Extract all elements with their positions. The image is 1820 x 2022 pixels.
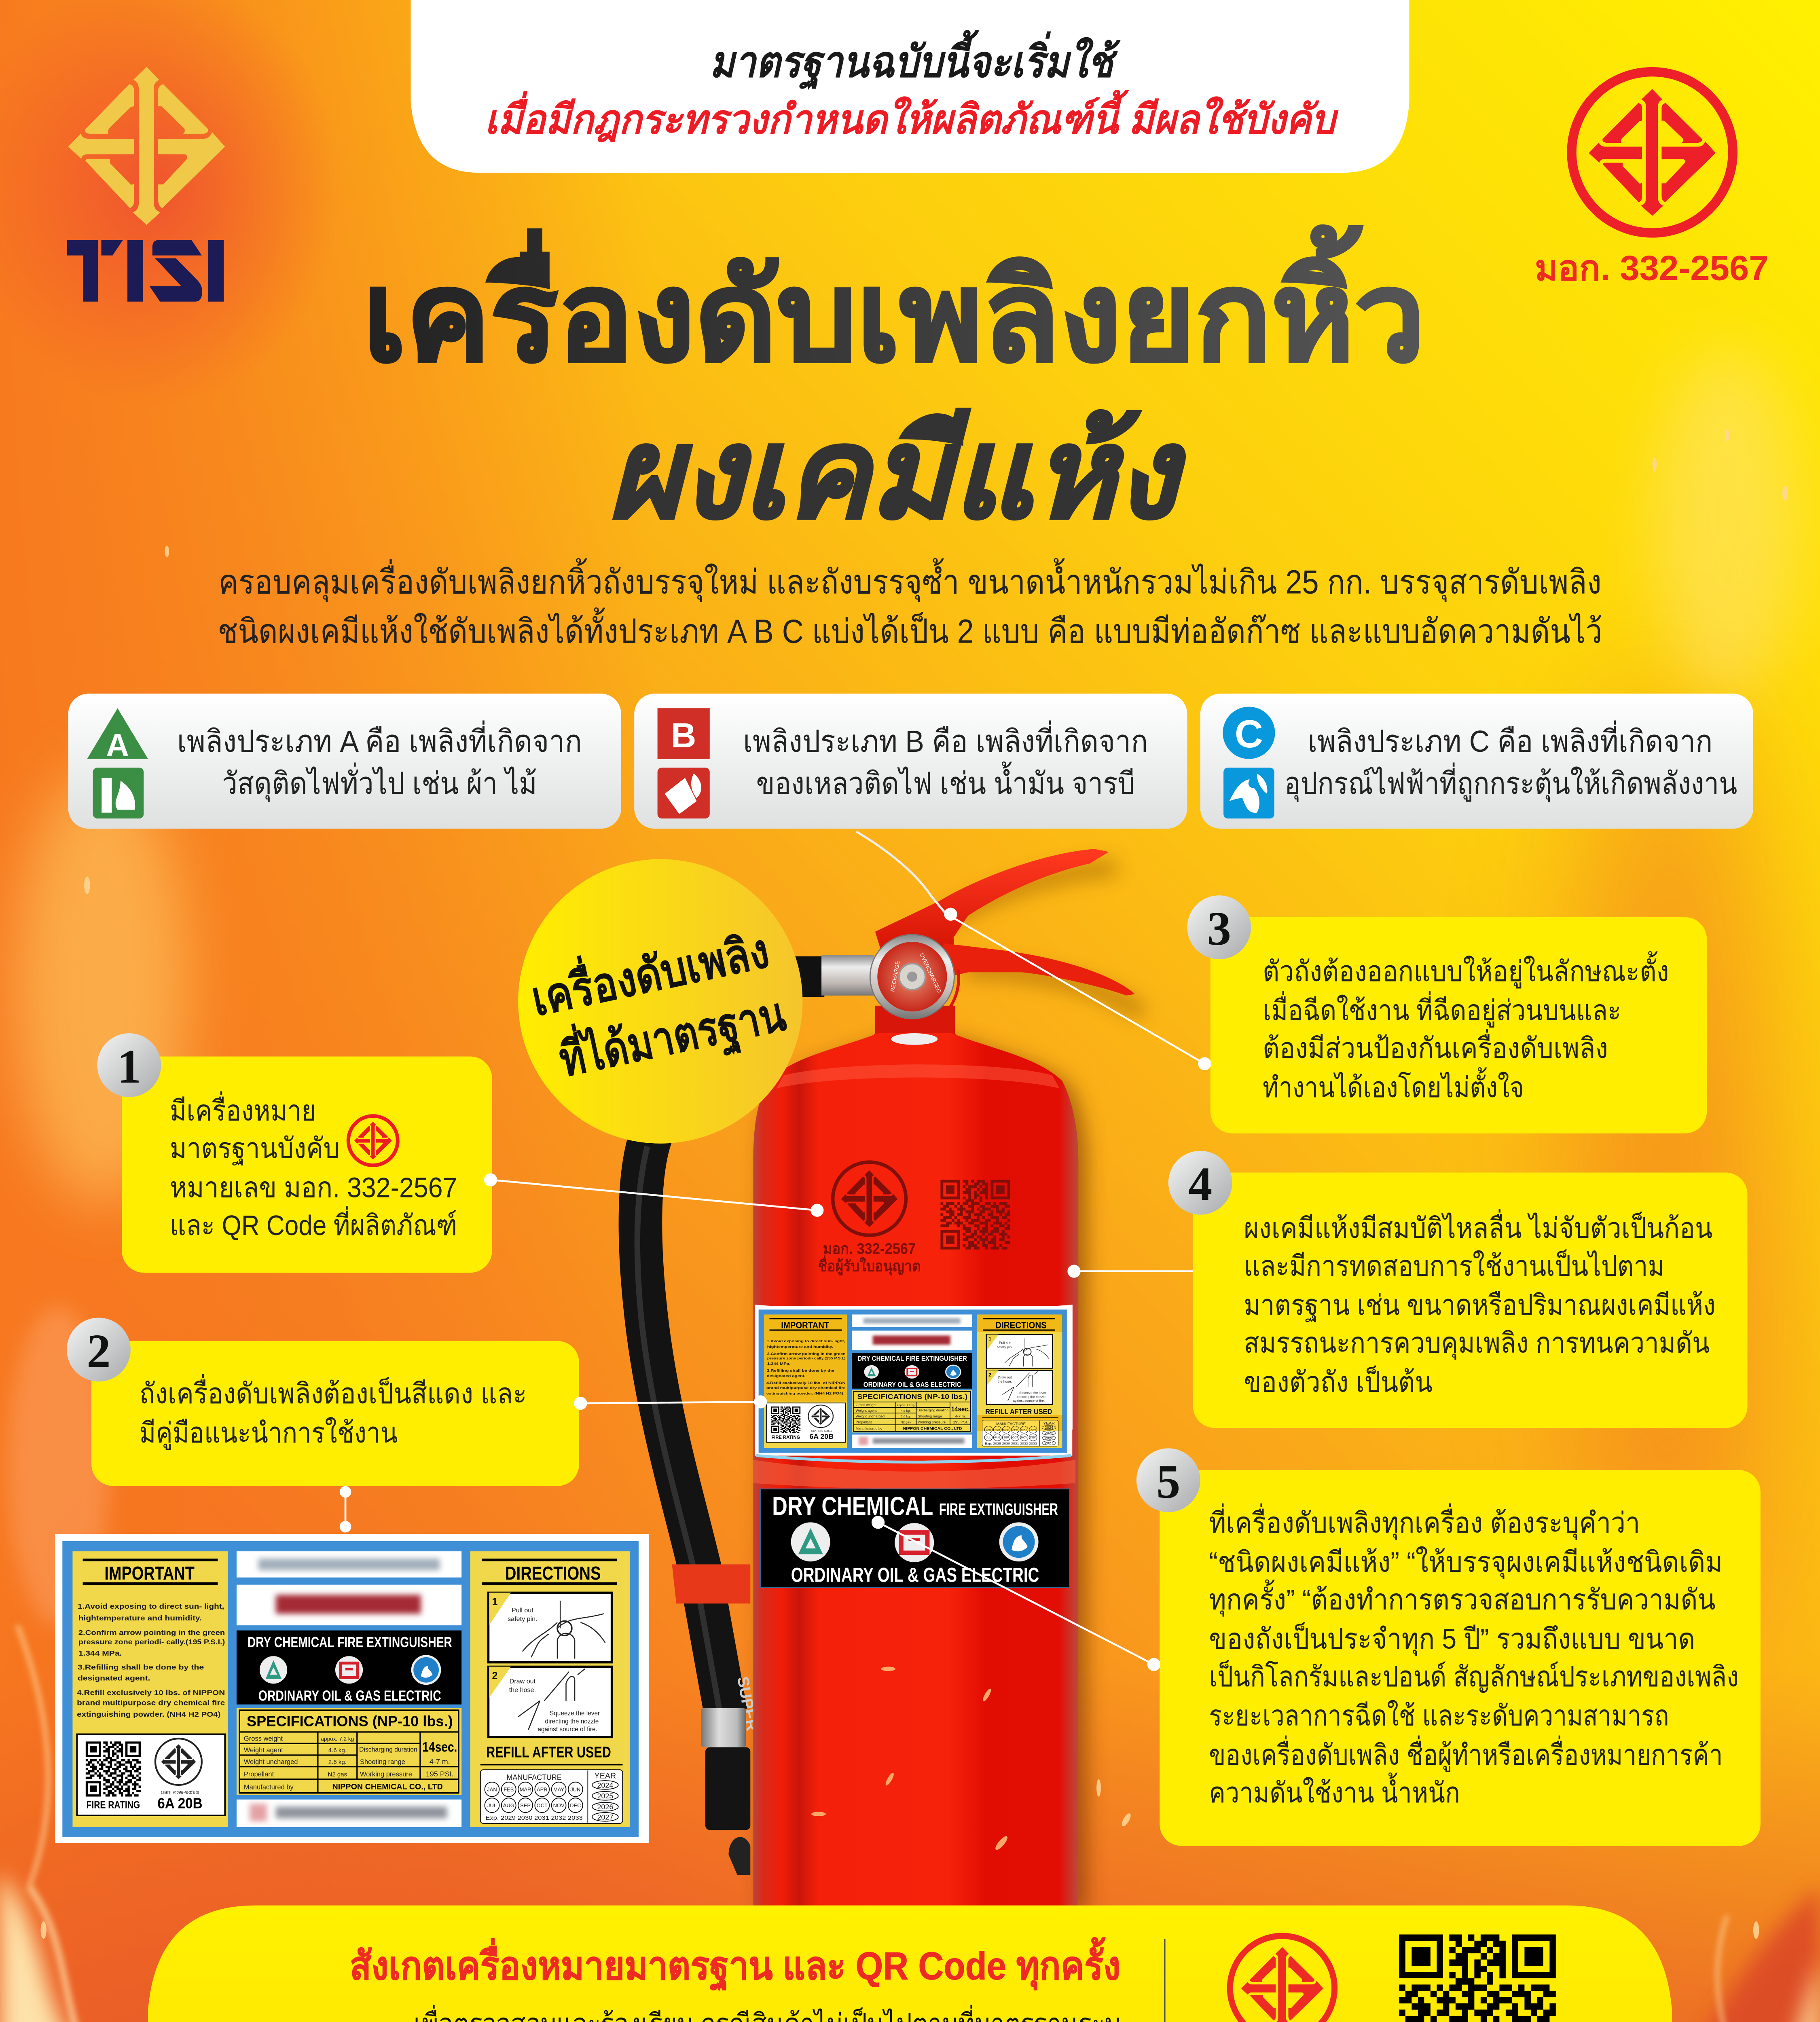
callout 4 text: ผงเคมีแห้งมีสมบัติไหลลื่น ไม่จับตัวเป็นก้อน <box>1244 1209 1712 1244</box>
callout 2 text: ถังเครื่องดับเพลิงต้องเป็นสีแดง และ <box>139 1374 527 1409</box>
label panel: product: Weight agent <box>244 1747 283 1754</box>
card: class B fire: ของเหลวติดไฟ เช่น น้ำมัน จารบี <box>756 761 1135 800</box>
callout 5: เป็นกิโลกรัมและปอนด์ สัญลักษณ์ประเภทของเพลิง <box>1209 1660 1739 1693</box>
callout 4: และมีการทดสอบการใช้งานเป็นไปตาม <box>1244 1249 1665 1282</box>
notice line 1: มาตรฐานฉบับนี้จะเริ่มใช้ <box>710 30 1121 90</box>
upper lever <box>875 849 1109 965</box>
label panel: directions: MANUFACTURE <box>506 1773 562 1782</box>
callout 3: ทำงานได้เองโดยไม่ตั้งใจ <box>1263 1067 1524 1103</box>
fire extinguisher <box>637 831 1142 1911</box>
embers on body <box>811 1667 1009 1852</box>
number 2: 2 <box>87 1324 111 1377</box>
label panel: directions: safety pin. <box>508 1615 538 1622</box>
card: class A fire: วัสดุติดไฟทั่วไป เช่น ผ้า ไม้ <box>222 762 537 802</box>
number 5: 5 <box>1156 1455 1180 1508</box>
callout 3: ต้องมีส่วนป้องกันเครื่องดับเพลิง <box>1263 1029 1608 1064</box>
icon: class B square: B <box>671 716 696 755</box>
label panel: directions: OCT <box>537 1802 548 1808</box>
clip bracket <box>672 1564 750 1603</box>
callout 2 <box>67 1318 579 1486</box>
label panel: product: DRY CHEMICAL FIRE EXTINGUISHER <box>248 1634 452 1650</box>
label panel: product: Working pressure <box>360 1770 412 1778</box>
card: class A fire <box>68 694 621 829</box>
label panel: directions: MAY <box>553 1786 564 1792</box>
label subline: ORDINARY OIL & GAS ELECTRIC <box>791 1563 1039 1586</box>
label panel: directions: YEAR <box>595 1772 616 1781</box>
label panel: directions: MAR <box>520 1786 531 1792</box>
label panel: important: brand multipurpose dry chemical fire <box>77 1699 225 1707</box>
lower lever <box>944 943 1135 996</box>
label panel: product <box>237 1551 461 1827</box>
black dry chemical label <box>760 1489 1070 1588</box>
label panel: important <box>72 1551 228 1827</box>
callout 1 text: มีเครื่องหมาย <box>170 1091 316 1126</box>
callout 5: “ชนิดผงเคมีแห้ง” “ให้บรรจุผงเคมีแห้งชนิดเดิม <box>1209 1546 1723 1579</box>
engraved standard mark <box>818 1162 921 1276</box>
label panel: product: 4-7 m. <box>430 1758 450 1766</box>
number 2 <box>67 1318 131 1381</box>
bottom info panel <box>148 1906 1672 2022</box>
number 1: 1 <box>117 1040 141 1093</box>
icon: class C circle: C <box>1235 712 1263 756</box>
small label on extinguisher <box>755 1305 1073 1462</box>
label panel: product: Manufactured by <box>244 1784 294 1791</box>
label panel: product: Propellant <box>244 1770 274 1778</box>
icon: class A triangle <box>87 708 148 763</box>
callout 1: มาตรฐานบังคับ <box>170 1133 340 1165</box>
intro paragraph <box>218 558 1602 650</box>
label panel: directions: DIRECTIONS <box>505 1563 601 1584</box>
label panel: important: 4.Refill exclusively 10 lbs. of NIPPON <box>77 1688 225 1696</box>
label panel: important: designated agent. <box>78 1674 150 1682</box>
small label yellow tint <box>764 1314 1062 1431</box>
icon: class A triangle: A <box>106 728 129 763</box>
callout 5: ทุกครั้ง” “ต้องทำการตรวจสอบการรับความดัน <box>1209 1580 1716 1617</box>
label panel: directions: AUG <box>503 1802 514 1808</box>
label panel: important: 1.344 MPa. <box>78 1649 122 1657</box>
label panel: directions: JUN <box>570 1786 580 1792</box>
callout 4: มาตรฐาน เช่น ขนาดหรือปริมาณผงเคมีแห้ง <box>1244 1289 1716 1322</box>
callout 5 <box>1136 1448 1761 1846</box>
card: class C fire: อุปกรณ์ไฟฟ้าที่ถูกกระตุ้นให้เกิดพลังงาน <box>1285 762 1737 802</box>
label panel: important: มอก. ๓๓๒-๒๕๖๗ <box>161 1789 199 1795</box>
icon: flammable liquids <box>658 768 710 819</box>
rim band <box>753 1460 1075 1489</box>
label panel: product: 195 PSI. <box>426 1770 454 1778</box>
notice line 2: เมื่อมีกฎกระทรวงกำหนดให้ผลิตภัณฑ์นี้ มีผลใช้บังคับ <box>485 89 1339 142</box>
callout 2: มีคู่มือแนะนำการใช้งาน <box>139 1417 398 1450</box>
top notice panel <box>411 0 1409 173</box>
label panel: directions <box>470 1551 630 1827</box>
label panel: product: ORDINARY OIL & GAS ELECTRIC <box>258 1688 441 1704</box>
icon: electrical equipment <box>1223 768 1274 819</box>
card text B: เพลิงประเภท B คือ เพลิงที่เกิดจาก <box>743 720 1148 758</box>
callout 5: ของเครื่องดับเพลิง ชื่อผู้ทำหรือเครื่องหมายการค้า <box>1209 1736 1723 1772</box>
label panel: directions: NOV <box>553 1802 565 1808</box>
label panel: directions: 2025 <box>597 1792 613 1800</box>
leader lines <box>340 908 1211 1671</box>
engraved standard mark: ชื่อผู้รับใบอนุญาต <box>818 1255 921 1276</box>
badge: certified extinguisher <box>518 859 802 1144</box>
callout 4: สมรรถนะการควบคุมเพลิง การทนความดัน <box>1244 1327 1710 1360</box>
card: class C fire <box>1200 694 1753 829</box>
label panel: important: 6A 20B <box>157 1795 203 1811</box>
TISI logo <box>67 67 225 302</box>
TISI wordmark <box>67 240 224 302</box>
label panel: important: 2.Confirm arrow pointing in the green <box>78 1629 225 1637</box>
safety pin wire <box>856 831 946 914</box>
label panel: directions: FEB <box>504 1786 514 1792</box>
card text A: เพลิงประเภท A คือ เพลิงที่เกิดจาก <box>177 720 582 758</box>
number 3: 3 <box>1207 902 1231 955</box>
icon: class B square <box>658 708 710 759</box>
label panel: product: appox. 7.2 kg <box>321 1736 354 1742</box>
label panel: important: FIRE RATING <box>87 1799 140 1810</box>
title line 2: ผงเคมีแห้ง <box>608 404 1186 544</box>
label panel: directions: Pull out <box>512 1607 533 1614</box>
label panel: product: Gross weight <box>244 1735 283 1742</box>
label panel: product: Discharging duration <box>359 1746 417 1753</box>
standard mark top right <box>1535 72 1769 288</box>
badge text: เครื่องดับเพลิง <box>525 917 774 1026</box>
hose connector <box>796 955 874 997</box>
enlarged specification label <box>55 1534 649 1843</box>
callout 3 <box>1187 895 1707 1134</box>
panel heading: สังเกตเครื่องหมายมาตรฐาน และ QR Code ทุกครั้ง <box>350 1937 1120 1992</box>
engraved QR code <box>940 1180 1010 1250</box>
label panel: directions: 2 <box>492 1670 497 1681</box>
number 4 <box>1168 1151 1232 1215</box>
number 4: 4 <box>1188 1157 1212 1211</box>
label panel: directions: DEC <box>570 1802 581 1808</box>
label panel: directions: the hose. <box>509 1686 536 1694</box>
embers <box>40 429 1788 1939</box>
callout 4 <box>1168 1151 1748 1428</box>
label panel: directions: against source of fire. <box>538 1726 597 1733</box>
label panel: directions: Exp. 2029 2030 2031 2032 2033 <box>485 1815 583 1821</box>
label panel: directions: JUL <box>487 1802 497 1808</box>
callout 3 text: ตัวถังต้องออกแบบให้อยู่ในลักษณะตั้ง <box>1263 951 1669 989</box>
icon: small standard mark <box>348 1116 398 1165</box>
label panel: directions: 2027 <box>597 1813 613 1821</box>
label panel: directions: REFILL AFTER USED <box>486 1744 611 1761</box>
black dry chemical label: FIRE EXTINGUISHER <box>939 1500 1058 1519</box>
label panel: directions: 2026 <box>597 1803 613 1811</box>
engraved text: มอก. 332-2567 <box>823 1240 916 1257</box>
icon: class C circle <box>1223 707 1275 759</box>
number 1 <box>97 1033 161 1097</box>
label panel: product: N2 gas <box>328 1771 347 1778</box>
label panel: product: NIPPON CHEMICAL CO., LTD <box>332 1783 443 1791</box>
pressure gauge <box>870 935 954 1019</box>
label panel: directions: Draw out <box>510 1678 536 1685</box>
cylinder body <box>753 1033 1078 1906</box>
label panel: product: Weight uncharged <box>244 1758 298 1766</box>
label panel: important: hightemperature and humidity. <box>78 1614 202 1622</box>
hose: SUPER <box>734 1675 761 1732</box>
label panel: important: 1.Avoid exposing to direct sun- light, <box>78 1602 224 1610</box>
callout 5: ระยะเวลาการฉีดใช้ และระดับความสามารถ <box>1209 1700 1669 1732</box>
label panel: product: Shooting range <box>360 1758 405 1766</box>
label panel: important: IMPORTANT <box>104 1563 195 1584</box>
hose <box>637 1125 761 1732</box>
label panel: product: 4.6 kg. <box>328 1747 347 1754</box>
icon: ordinary combustibles <box>93 768 144 819</box>
callout 5: ความดันใช้งาน น้ำหนัก <box>1209 1772 1460 1808</box>
main title <box>363 225 1425 544</box>
main title: เครื่องดับเพลิงยกหิ้ว <box>363 225 1425 387</box>
label panel: important: 3.Refilling shall be done by the <box>78 1663 204 1671</box>
lever shadow <box>946 868 1142 1013</box>
callout 3: เมื่อฉีดใช้งาน ที่ฉีดอยู่ส่วนบนและ <box>1263 991 1621 1028</box>
label icons <box>791 1522 1039 1562</box>
callout 5 text: ที่เครื่องดับเพลิงทุกเครื่อง ต้องระบุคำว่า <box>1209 1503 1640 1540</box>
pressure gauge: RECHARGE <box>889 960 901 992</box>
hose ferrule and nozzle <box>701 1708 750 1875</box>
label panel: product: 2.6 kg. <box>328 1759 347 1766</box>
standard mark <box>1208 1936 1358 2022</box>
bottom left flame <box>0 1872 151 2022</box>
number 5 <box>1136 1448 1200 1512</box>
label panel: product: SPECIFICATIONS (NP-10 lbs.) <box>247 1713 453 1730</box>
extinguisher shadow <box>762 1039 1087 1911</box>
label panel: directions: Squeeze the lever <box>550 1710 600 1717</box>
label panel: important: extinguishing powder. (NH4 H2 PO4) <box>77 1710 220 1718</box>
standard number: มอก. 332-2567 <box>1535 249 1769 288</box>
label headline: DRY CHEMICAL <box>772 1491 933 1521</box>
card: class B fire <box>634 694 1187 829</box>
callout 1: และ QR Code ที่ผลิตภัณฑ์ <box>170 1206 457 1241</box>
label panel: directions: APR <box>537 1786 548 1792</box>
card text C: เพลิงประเภท C คือ เพลิงที่เกิดจาก <box>1308 720 1712 758</box>
pressure gauge: OVERCHARGED <box>918 952 942 994</box>
cylinder neck <box>862 1006 969 1048</box>
badge text: ที่ได้มาตรฐาน <box>553 980 791 1091</box>
label panel: directions: SEP <box>520 1802 531 1808</box>
QR code <box>1399 1934 1556 2022</box>
label panel: directions: 2024 <box>597 1781 613 1789</box>
label panel: directions: JAN <box>487 1786 497 1792</box>
number 3 <box>1187 895 1251 959</box>
callout 4: ของตัวถัง เป็นต้น <box>1244 1365 1433 1398</box>
label panel: product: 14sec. <box>422 1739 457 1755</box>
callout 1: หมายเลข มอก. 332-2567 <box>170 1172 457 1203</box>
intro paragraph: ครอบคลุมเครื่องดับเพลิงยกหิ้วถังบรรจุใหม่ และถังบรรจุซ้ำ ขนาดน้ำหนักรวมไม่เกิน 25 กก. บรรจุสารดับเพลิง <box>218 558 1602 603</box>
label panel: directions: directing the nozzle <box>545 1718 599 1725</box>
bottom right flame <box>1669 1887 1820 2022</box>
label panel: important: pressure zone periodi- cally.(195 P.S.I.) <box>78 1638 225 1646</box>
callout 1 <box>97 1033 492 1273</box>
callout 5: ของถังเป็นประจำทุก 5 ปี” รวมถึงแบบ ขนาด <box>1209 1622 1695 1656</box>
badge text <box>525 916 791 1094</box>
intro paragraph: ชนิดผงเคมีแห้งใช้ดับเพลิงได้ทั้งประเภท A B C แบ่งได้เป็น 2 แบบ คือ แบบมีท่ออัดก๊าซ และแบบอัดความดันไว้ <box>218 607 1602 650</box>
label panel: directions: 1 <box>492 1596 498 1607</box>
